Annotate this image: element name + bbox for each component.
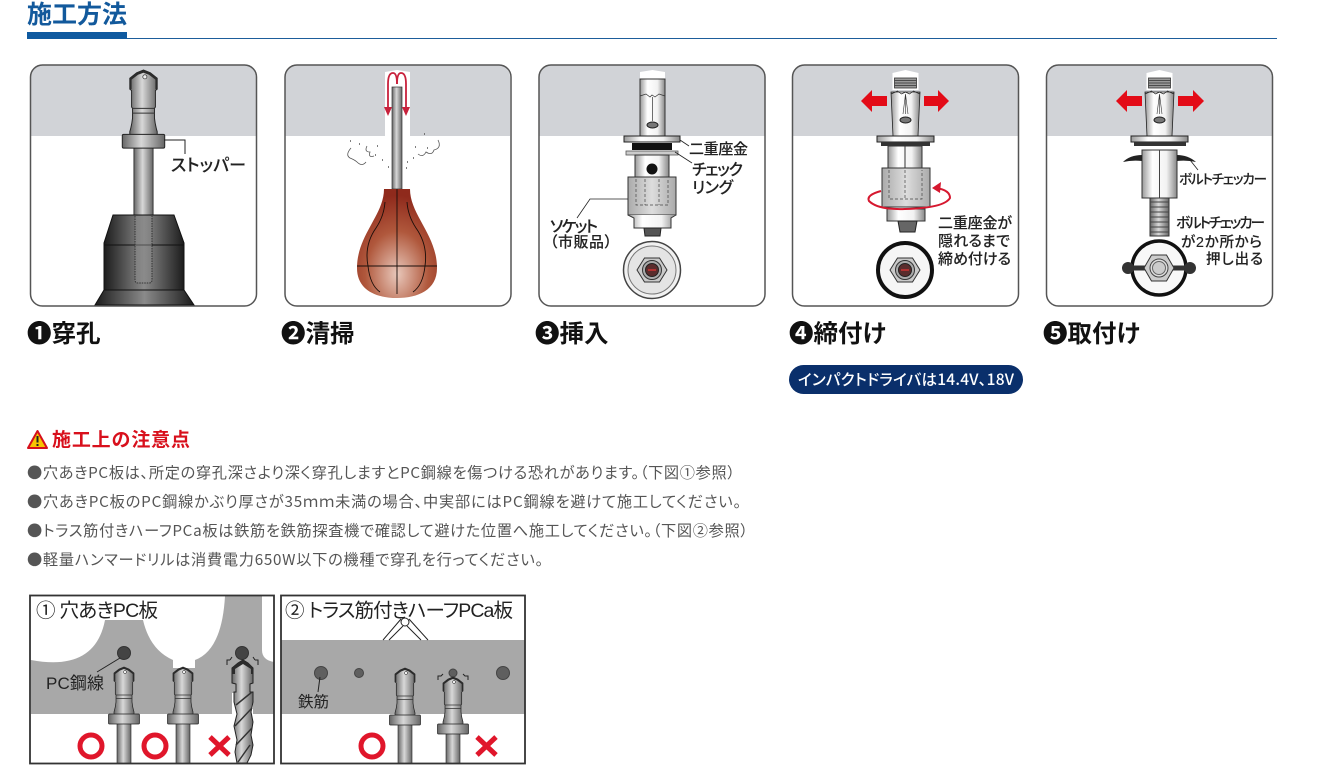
title: ② トラス筋付きハーフPCa板 — [285, 600, 513, 622]
rebar dots — [314, 666, 510, 680]
bit: bad long hammer drill — [227, 657, 258, 763]
step caption 4: ❹締付け — [789, 315, 887, 350]
icon: red expansion arrows — [861, 90, 949, 112]
label: bolt checker: ボルトチェッカー — [1179, 172, 1267, 187]
label: stopper: ストッパー — [171, 156, 246, 175]
icon: rubber blower bulb — [357, 189, 437, 298]
title: ① 穴あきPC板 — [36, 600, 158, 622]
step caption 2: ❷清掃 — [281, 315, 354, 350]
step caption 5: ❺取付け — [1043, 315, 1141, 350]
step caption 1: ❶穿孔 — [27, 315, 100, 350]
diagram 1: hollow PC slab — [30, 596, 274, 777]
icon: bolt checker tabs — [1123, 155, 1196, 162]
ng mark — [210, 737, 229, 755]
label: tighten until washer hidden: 締め付ける — [938, 250, 1011, 268]
icon: washer, sleeve and socket — [877, 136, 934, 232]
badge: impact driver note: インパクトドライバは14.4V、18V — [798, 368, 1015, 390]
label: check ring: チェック — [692, 161, 743, 179]
text block: precautions list: ●軽量ハンマードリルは消費電力650W以下の機種で穿孔を行ってください。 — [27, 548, 543, 570]
icon: red expansion arrows — [1116, 90, 1204, 112]
ok mark — [144, 735, 166, 757]
text block: precautions list — [27, 461, 748, 570]
label: socket: ソケット — [550, 218, 598, 236]
icon: dust particles — [348, 134, 439, 168]
panel: step 4 tightening — [792, 65, 1018, 306]
bit: acceptable centre — [168, 667, 198, 777]
text block: precautions list: ●穴あきPC板は、所定の穿孔深さより深く穿孔しますとPC鋼線を傷つける恐れがあります。（下図①参照） — [27, 461, 735, 483]
icon: expanding anchor — [1145, 70, 1174, 136]
heading: construction precautions: 施工上の注意点 — [52, 425, 190, 452]
panel: step 5 installed — [1046, 65, 1272, 306]
panel: step 1 drilling — [30, 65, 256, 306]
panel: step 3 insertion — [539, 65, 765, 306]
label: rebar: 鉄筋 — [298, 693, 329, 711]
PC steel wires — [118, 646, 248, 660]
slab cross-section — [281, 640, 525, 714]
label: socket — [550, 218, 612, 251]
icon: end view with bolt checker pins — [1122, 241, 1196, 295]
label: check ring — [692, 161, 743, 197]
label: checker protrudes at two places: ボルトチェッカー — [1176, 215, 1265, 232]
label: checker protrudes at two places: が2か所から — [1181, 233, 1262, 251]
icon: end view with black ring — [878, 243, 932, 297]
icon: socket end view — [624, 242, 680, 298]
label: socket: （市販品） — [550, 233, 612, 251]
label: checker protrudes at two places: 押し出る — [1206, 251, 1263, 268]
text block: precautions list: ●トラス筋付きハーフPCa板は鉄筋を鉄筋探査機で確認して避けた位置へ施工してください。（下図②参照） — [27, 519, 748, 541]
icon: hammer drill chuck — [95, 215, 194, 305]
leader line — [97, 658, 120, 672]
icon: anchor in hole with socket — [624, 70, 680, 236]
icon: red rotation arrow — [868, 182, 950, 209]
bit: bad hitting rebar — [437, 674, 469, 763]
leader lines — [577, 140, 692, 218]
icon: expanding anchor — [891, 70, 920, 136]
step caption 3: ❸挿入 — [535, 315, 608, 350]
label: tighten until washer hidden: 隠れるまで — [938, 233, 1010, 250]
icon: red air flow arrows — [384, 73, 410, 116]
label: PC steel wire: PC鋼線 — [46, 674, 104, 693]
bit: acceptable left — [108, 667, 140, 777]
icon: washer, sleeve and threaded bolt — [1131, 136, 1188, 236]
label: tighten until washer hidden: 二重座金が — [938, 214, 1012, 232]
diagram 2: half PCa slab with truss — [281, 596, 525, 777]
icon: warning triangle — [28, 431, 47, 448]
bit: acceptable — [390, 668, 420, 777]
slab cross-section — [31, 596, 274, 714]
label: tighten until washer hidden — [938, 214, 1012, 268]
panel: step 2 cleaning — [285, 65, 511, 306]
label: double washer: 二重座金 — [689, 141, 748, 158]
label: check ring: リング — [692, 179, 734, 197]
icon: drill bit with stopper — [122, 70, 165, 228]
heading underline — [27, 32, 1277, 39]
truss bars — [383, 618, 428, 640]
ok mark — [80, 735, 102, 757]
ng mark — [477, 737, 496, 755]
icon: blower tube — [392, 87, 402, 189]
ok mark — [361, 735, 383, 757]
leader line — [318, 677, 320, 692]
stopper leader line — [164, 140, 185, 154]
text block: precautions list: ●穴あきPC板のPC鋼線かぶり厚さが35ｍｍ未満の場合、中実部にはPC鋼線を避けて施工してください。 — [27, 490, 741, 512]
label: checker protrudes at two places — [1176, 215, 1265, 268]
leader line — [1190, 160, 1198, 170]
